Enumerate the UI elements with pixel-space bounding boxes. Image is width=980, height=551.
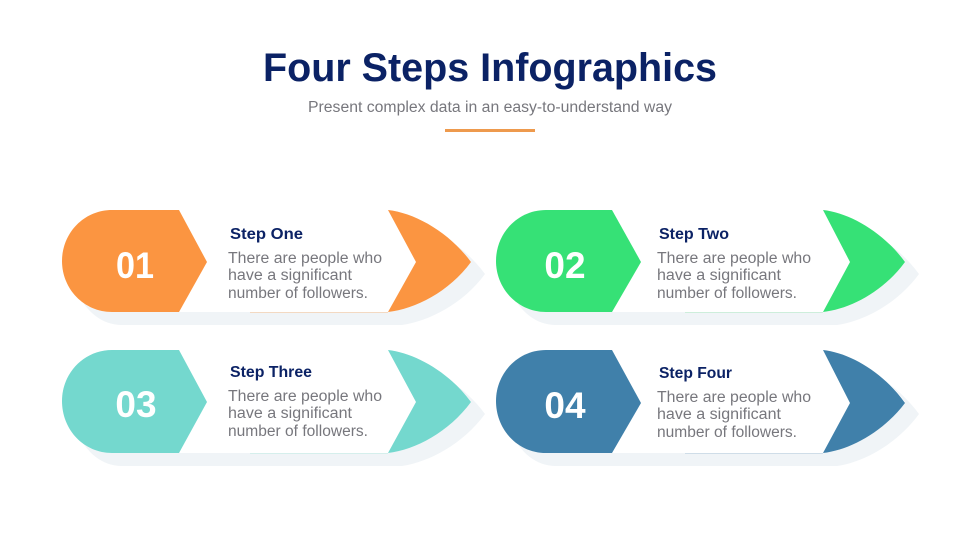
card body <box>62 350 471 453</box>
step description: There are people who <box>657 250 811 267</box>
card body <box>496 210 905 312</box>
step 2 card <box>496 210 919 325</box>
step heading: Step Two <box>659 226 729 243</box>
number tab <box>62 350 207 453</box>
card body <box>496 350 905 453</box>
accent underline <box>445 129 535 132</box>
step description: number of followers. <box>228 423 368 440</box>
step description: number of followers. <box>657 424 797 441</box>
step description: There are people who <box>657 389 811 406</box>
step heading: Step One <box>230 226 303 243</box>
step 4 card <box>496 350 919 466</box>
number: 01 <box>116 245 154 286</box>
step heading: Step Four <box>659 365 732 382</box>
step description: number of followers. <box>657 285 797 302</box>
step 3 card <box>62 350 485 466</box>
number: 02 <box>544 245 586 286</box>
bottom edge line <box>250 453 388 454</box>
card body <box>62 210 471 312</box>
number tab <box>496 350 641 453</box>
step description: have a significant <box>228 405 353 422</box>
number tab <box>62 210 207 312</box>
number: 03 <box>115 384 157 425</box>
card shadow <box>510 362 919 466</box>
subtitle: Present complex data in an easy-to-understand way <box>308 99 672 116</box>
card shadow <box>510 222 919 325</box>
title: Four Steps Infographics <box>263 46 717 90</box>
step heading: Step Three <box>230 364 312 381</box>
card shadow <box>76 222 485 325</box>
right chevron <box>388 350 471 453</box>
right chevron <box>388 210 471 312</box>
step description: There are people who <box>228 388 382 405</box>
step description: have a significant <box>657 267 782 284</box>
bottom edge line <box>685 312 823 313</box>
number: 04 <box>544 385 586 426</box>
right chevron <box>823 350 905 453</box>
right chevron <box>823 210 905 312</box>
bottom edge line <box>250 312 388 313</box>
step description: have a significant <box>657 406 782 423</box>
step description: number of followers. <box>228 285 368 302</box>
step description: have a significant <box>228 267 353 284</box>
bottom edge line <box>685 453 823 454</box>
card shadow <box>76 362 485 466</box>
step description: There are people who <box>228 250 382 267</box>
number tab <box>496 210 641 312</box>
step 1 card <box>62 210 485 325</box>
